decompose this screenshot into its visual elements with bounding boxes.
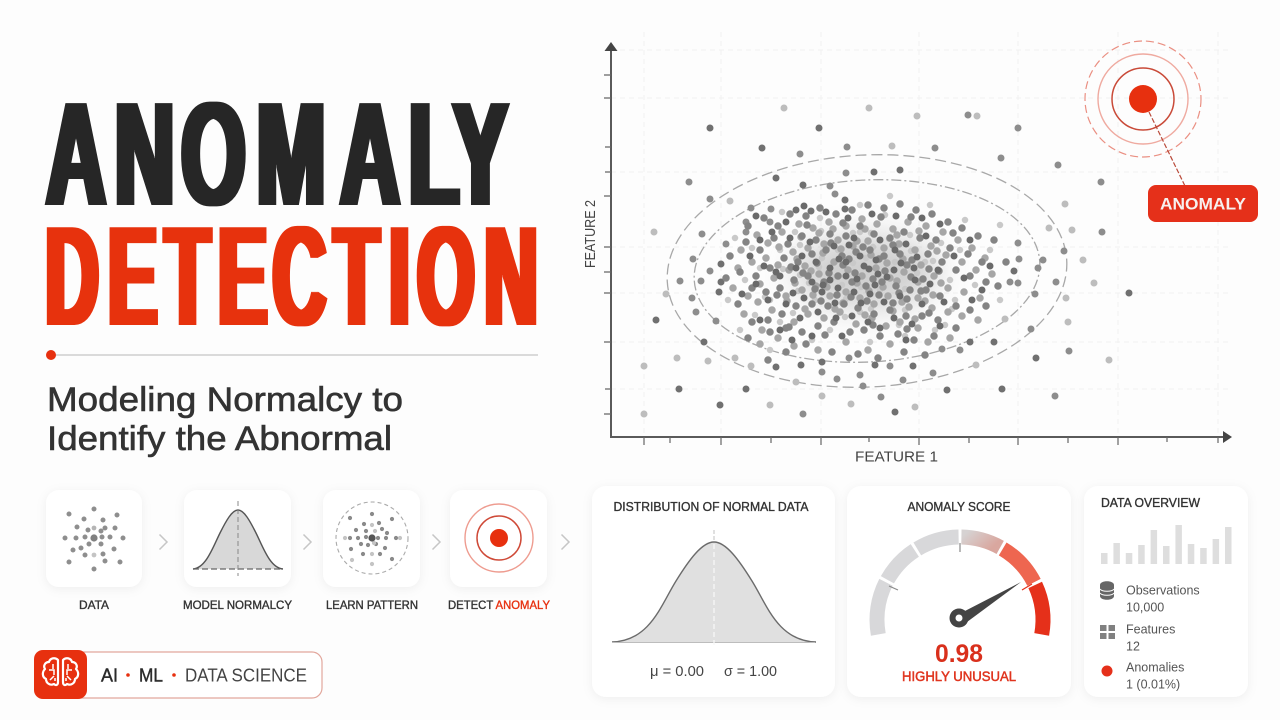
step: model normalcy xyxy=(183,490,292,612)
bell curve xyxy=(612,530,816,646)
heading: ANOMALY SCORE xyxy=(908,500,1010,514)
badge text xyxy=(101,666,307,686)
density underlay xyxy=(795,236,939,308)
stat: features: Features xyxy=(1126,622,1175,636)
heading: DISTRIBUTION OF NORMAL DATA xyxy=(614,500,809,514)
panel: distribution of normal data xyxy=(592,486,835,697)
axes xyxy=(604,42,1232,445)
arrow xyxy=(160,534,167,550)
mini bar chart xyxy=(1101,525,1232,564)
pipeline: four process steps xyxy=(46,490,569,612)
stat: observations xyxy=(1100,581,1200,614)
subtitle: Identify the Abnormal xyxy=(47,420,392,458)
data points xyxy=(644,108,1129,414)
badge text: DATA SCIENCE xyxy=(185,666,307,686)
step: data xyxy=(46,490,142,612)
anomaly connector xyxy=(1149,112,1185,186)
title line: DETECTION: DETECTION xyxy=(45,197,538,355)
stat: observations: 10,000 xyxy=(1126,600,1164,614)
axis label: feature 1: FEATURE 1 xyxy=(855,448,938,466)
step: learn pattern xyxy=(323,490,420,612)
label: learn pattern: LEARN PATTERN xyxy=(326,600,418,612)
step: detect anomaly xyxy=(448,490,550,612)
normal boundary ellipses xyxy=(661,145,1073,397)
gauge needle xyxy=(950,582,1021,628)
heading: DATA OVERVIEW xyxy=(1101,496,1200,510)
arrow xyxy=(562,534,569,550)
stat: features: 12 xyxy=(1126,640,1140,654)
label: data: DATA xyxy=(79,600,109,612)
title: anomaly detection xyxy=(45,72,538,355)
title line: ANOMALY: ANOMALY xyxy=(46,72,508,237)
arrow xyxy=(304,534,311,550)
arrow xyxy=(432,534,440,550)
panel: distribution of normal data: σ = 1.00 xyxy=(724,664,777,680)
callout: anomaly: ANOMALY xyxy=(1160,194,1247,214)
label: model normalcy: MODEL NORMALCY xyxy=(183,600,292,612)
parameters: μ = 0.00 xyxy=(650,664,704,680)
stat: anomalies: 1 (0.01%) xyxy=(1126,678,1180,692)
axis label: feature 2: FEATURE 2 xyxy=(582,200,599,268)
panel: data overview xyxy=(1084,486,1248,697)
title divider with red dot xyxy=(46,350,538,360)
stat: anomalies xyxy=(1102,660,1184,692)
score value: 0.98 xyxy=(935,640,983,668)
scatter chart xyxy=(582,32,1258,466)
callout: anomaly xyxy=(1148,185,1258,222)
subtitle xyxy=(47,381,403,458)
stat: observations: Observations xyxy=(1126,584,1200,598)
anomaly target xyxy=(1085,41,1201,186)
subtitle: Modeling Normalcy to xyxy=(47,381,403,419)
badge text: AI xyxy=(101,666,118,686)
stat: features xyxy=(1100,622,1175,654)
grid lines xyxy=(611,32,1230,437)
stat: anomalies: Anomalies xyxy=(1126,660,1184,674)
badge: AI ML data science xyxy=(34,650,322,699)
score verdict: HIGHLY UNUSUAL xyxy=(902,669,1016,684)
panel: anomaly score xyxy=(847,486,1071,697)
icon: brain xyxy=(34,650,87,699)
gauge xyxy=(877,537,1043,634)
badge text: ML xyxy=(139,666,163,686)
label: detect anomaly: DETECT ANOMALY xyxy=(448,600,550,612)
